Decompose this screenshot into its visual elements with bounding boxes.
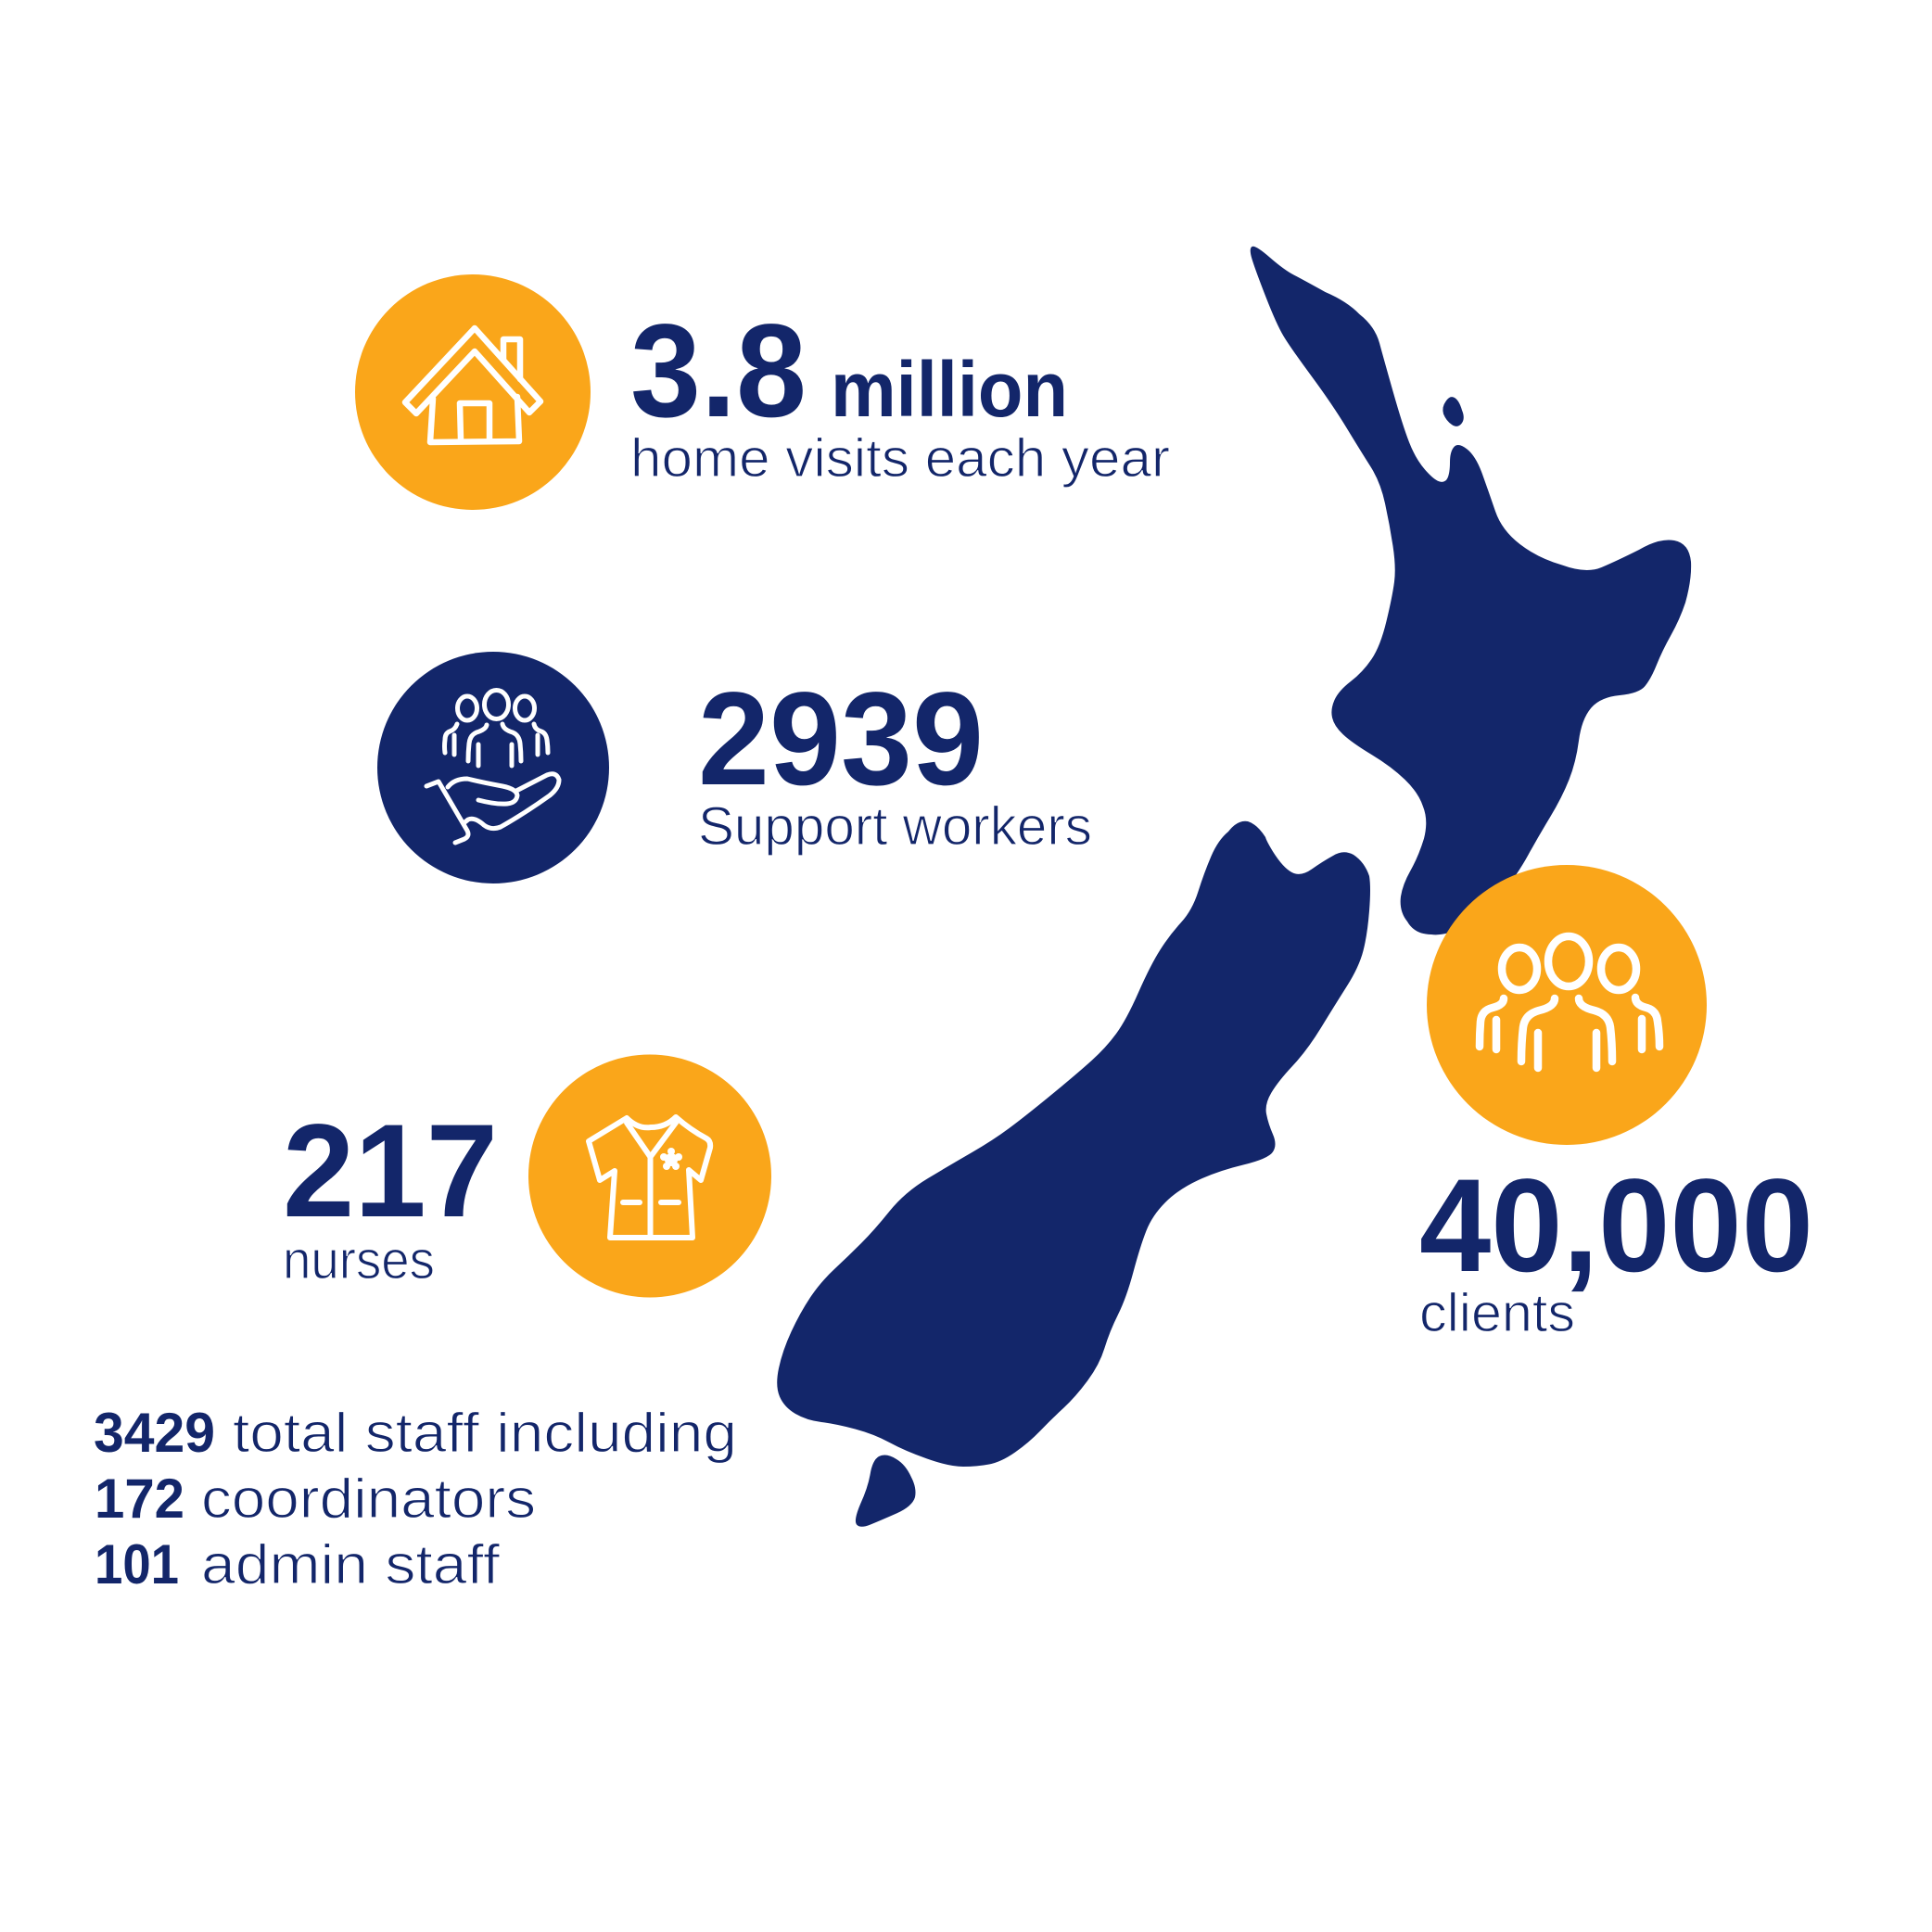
- South Island: [777, 821, 1370, 1467]
- stat number: 3.8 million: million: [831, 346, 1068, 433]
- line: 172 coordinators: coordinators: [201, 1468, 536, 1530]
- small island: Great Barrier: [1443, 397, 1464, 426]
- label: clients: clients: [1419, 1283, 1575, 1343]
- stat: nurses: [283, 1055, 771, 1298]
- label: nurses: nurses: [283, 1230, 435, 1290]
- text block: staff totals: [94, 1402, 737, 1595]
- North Island: [1251, 247, 1691, 934]
- stat number: 40,000: 40,000: [1419, 1152, 1813, 1300]
- stat: clients: [1419, 865, 1813, 1343]
- line: 101 admin staff: 101: [95, 1533, 179, 1595]
- Stewart Island: [856, 1455, 916, 1527]
- stat: support workers: [377, 652, 1092, 883]
- icon: house in orange circle: [355, 274, 591, 510]
- icon: people in open hand, navy circle: [377, 652, 609, 883]
- stat number: 3.8 million: [630, 298, 1068, 445]
- map: New Zealand: [777, 247, 1691, 1527]
- icon: group of people in orange circle: [1427, 865, 1707, 1145]
- line: 172 coordinators: 172: [95, 1468, 184, 1530]
- stat number: 3.8 million: 3.8: [630, 298, 807, 445]
- icon: flower badge: [660, 1148, 682, 1170]
- icon: nurse tunic in orange circle: [528, 1055, 771, 1298]
- stat number: 217: 217: [283, 1098, 498, 1245]
- line: 101 admin staff: admin staff: [201, 1533, 500, 1595]
- line: 101 admin staff: [95, 1533, 500, 1595]
- label: home visits each year: home visits each year: [630, 428, 1170, 489]
- line: 3429 total staff including: total staff including: [233, 1402, 737, 1464]
- line: 3429 total staff including: 3429: [94, 1402, 215, 1464]
- stat: home visits: [355, 274, 1170, 510]
- stat number: 2939: 2939: [698, 666, 984, 813]
- line: 172 coordinators: [95, 1468, 536, 1530]
- label: Support workers: Support workers: [698, 796, 1092, 857]
